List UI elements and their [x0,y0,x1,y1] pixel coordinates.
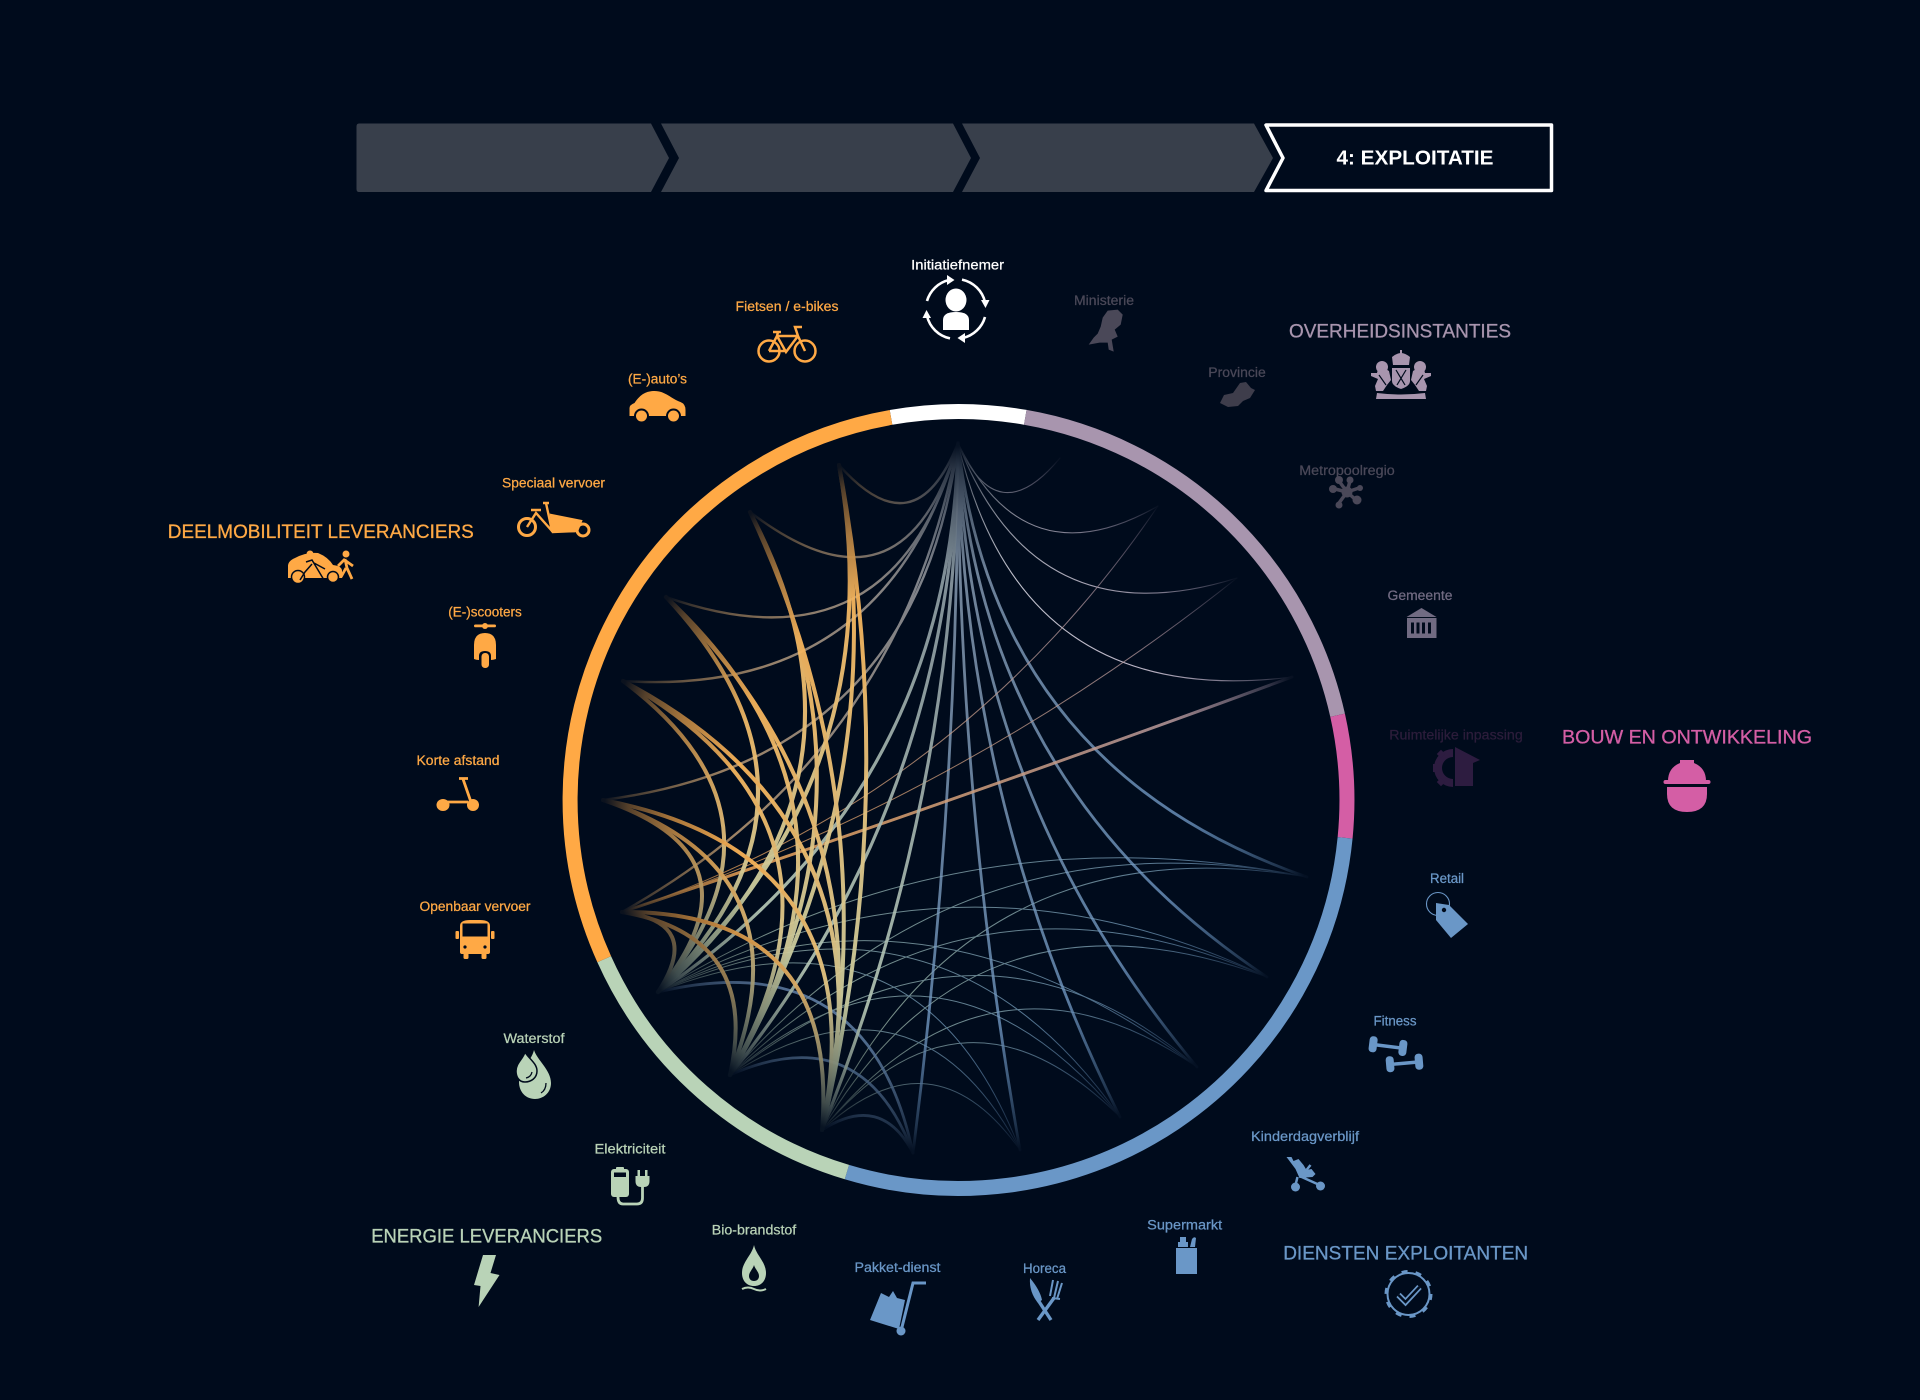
node: Speciaal vervoer [502,476,606,536]
node: Pakket-dienst [854,1260,941,1336]
label: Horeca [1023,1261,1066,1276]
label: Supermarkt [1147,1218,1222,1232]
icon: grocery bag [1176,1237,1197,1274]
heading: ENERGIE LEVERANCIERS [371,1226,602,1248]
ring segment: energy [604,959,847,1172]
label: Korte afstand [416,753,500,768]
heading: DEELMOBILITEIT LEVERANCIERS [168,522,474,543]
chevron 2 [661,124,971,192]
ring [570,412,1347,1188]
icon: network blob [1329,476,1363,508]
icon: cutlery [1030,1278,1062,1320]
ring segment: construction [1338,715,1347,838]
phase chevrons [356,124,1552,192]
chords: initiator to mobility [603,443,958,912]
icon: battery and plug [611,1167,650,1204]
icon: price tag [1426,892,1468,938]
icon: bus [456,920,494,959]
node: Metropoolregio [1299,463,1395,508]
node: Gemeente [1388,588,1452,638]
node: Supermarkt [1147,1218,1222,1274]
group heading: Deelmobiliteit leveranciers [168,522,474,584]
group heading: Overheidsinstanties [1289,322,1511,399]
node: Bio-brandstof [712,1222,797,1290]
icon: lightning bolt [474,1255,500,1307]
icon: bicycle [758,327,816,362]
icon: shared car and people [288,550,353,584]
label: Gemeente [1388,588,1452,603]
icon: gear and house [1433,747,1480,787]
icon: province shape [1220,382,1255,407]
icon: gear with check [1386,1272,1431,1316]
heading: OVERHEIDSINSTANTIES [1289,322,1511,342]
label: Bio-brandstof [712,1222,797,1238]
node: Fietsen / e-bikes [736,299,839,362]
chords: initiator to energy [658,443,958,1130]
chevron 3 [962,124,1273,192]
group heading: Energie leveranciers [371,1226,602,1307]
icon: coat of arms [1371,350,1431,399]
chevron 4 active: 4: EXPLOITATIE [1336,148,1494,170]
icon: stroller [1286,1157,1325,1192]
icon: hard hat [1664,760,1710,812]
label: Initiatiefnemer [911,258,1005,272]
icon: parcel trolley [870,1283,926,1336]
chords: mobility to energy [603,465,866,1130]
heading: BOUW EN ONTWIKKELING [1562,728,1812,748]
heading: DIENSTEN EXPLOITANTEN [1283,1244,1528,1264]
ring segment: mobility [570,417,891,959]
label: (E-)auto’s [628,372,687,386]
label: Metropoolregio [1299,463,1395,478]
chords: energy to services thin [658,858,1307,1150]
label: Kinderdagverblijf [1251,1129,1359,1144]
label: Pakket-dienst [854,1260,941,1275]
icon: map of the Netherlands [1089,310,1123,352]
node: Ruimtelijke inpassing [1389,728,1523,787]
icon: moped [474,623,496,668]
node: Elektriciteit [594,1142,666,1204]
node: (E-)scooters [448,604,522,668]
group heading: Bouw en ontwikkeling [1562,728,1812,812]
label: Elektriciteit [594,1142,666,1156]
node: Fitness [1368,1014,1424,1073]
node: Openbaar vervoer [420,899,531,959]
chevron 4 active [1266,125,1552,190]
label: Retail [1430,871,1464,886]
node: Provincie [1208,365,1266,407]
chords: initiator to services [913,443,1307,1153]
node: Ministerie [1074,293,1134,352]
icon: town hall [1406,608,1436,638]
node: Retail [1426,871,1468,938]
chords: initiator to government [958,443,1292,681]
node: Horeca [1023,1261,1066,1320]
label: Speciaal vervoer [502,476,606,490]
label: Openbaar vervoer [420,899,531,914]
label: Ruimtelijke inpassing [1389,728,1523,742]
chords: energy to parcel service [658,982,913,1153]
icon: person in cycle [922,275,990,343]
node: (E-)auto's [628,372,687,424]
icon: dumbbells [1368,1036,1424,1073]
label: Waterstof [504,1031,565,1046]
chord diagram [603,443,1307,1153]
label: Provincie [1208,365,1266,380]
ring segment: government [1025,417,1338,715]
chords: public transport to government [622,506,1292,912]
label: Ministerie [1074,293,1134,308]
icon: flame [742,1245,766,1290]
icon: car [630,391,686,424]
chevron 1 [356,124,669,192]
label: Fietsen / e-bikes [736,299,839,314]
icon: kick scooter [436,778,479,811]
ring segment: services [847,838,1345,1188]
label: (E-)scooters [448,604,522,620]
group heading: Diensten exploitanten [1283,1244,1528,1316]
node: Kinderdagverblijf [1251,1129,1359,1192]
node: Waterstof [504,1031,565,1099]
label: Fitness [1374,1014,1417,1028]
node: Initiatiefnemer [911,258,1005,343]
chord tip fade [580,422,1336,1178]
icon: cargo bike [518,503,589,536]
ring segment: initiator [891,412,1025,417]
node: Korte afstand [416,753,500,811]
icon: water drops [516,1050,551,1099]
